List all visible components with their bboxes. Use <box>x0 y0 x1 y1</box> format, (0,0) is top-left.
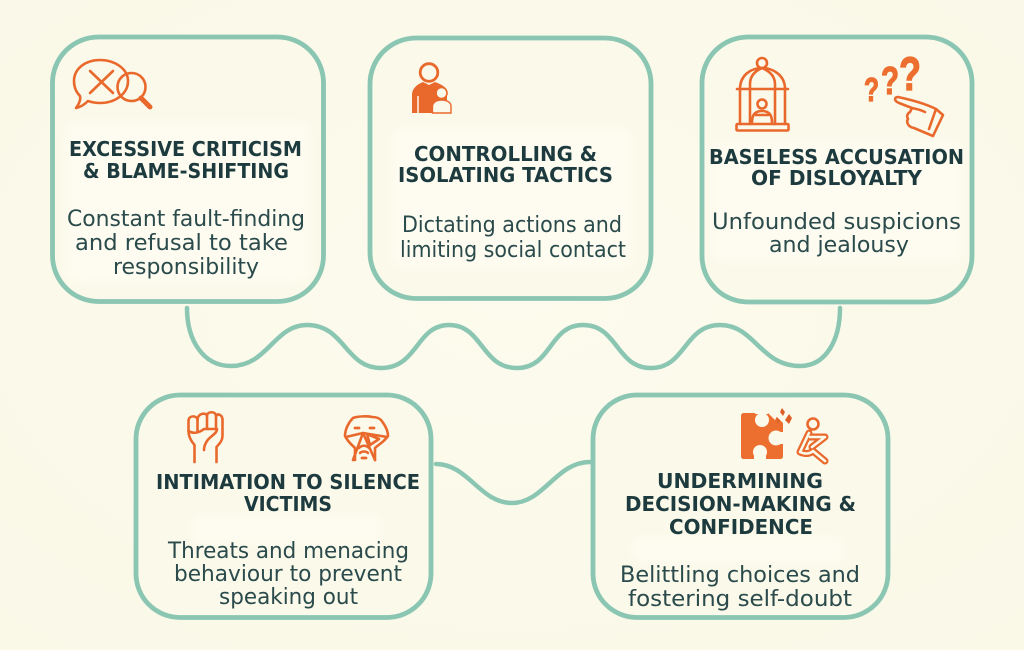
heading: CONTROLLING & <box>414 142 597 166</box>
panel: baseless accusation <box>702 37 972 302</box>
icon: question marks <box>864 47 921 108</box>
heading: UNDERMINING <box>657 469 823 493</box>
icon: broken puzzle piece <box>741 408 792 461</box>
panel: undermining confidence <box>593 395 888 618</box>
icon: speech bubble and magnifier <box>74 60 150 108</box>
body text <box>400 213 626 263</box>
connector: short wave between bottom cards <box>436 462 590 503</box>
body text <box>167 539 409 610</box>
heading: ISOLATING TACTICS <box>398 163 613 187</box>
heading <box>709 145 964 190</box>
body text <box>620 563 860 612</box>
heading <box>398 142 613 187</box>
body text: Unfounded suspicions <box>712 210 961 235</box>
heading: & BLAME-SHIFTING <box>83 159 289 183</box>
icon: raised fist <box>188 412 222 462</box>
icon: crouching figure <box>800 418 825 461</box>
body text: behaviour to prevent <box>174 562 402 587</box>
heading: EXCESSIVE CRITICISM <box>69 137 302 161</box>
body text <box>67 207 305 280</box>
icon: pointing hand <box>895 97 943 136</box>
heading <box>625 469 856 539</box>
body text: and refusal to take <box>75 231 288 256</box>
heading <box>156 470 420 516</box>
body text: Threats and menacing <box>167 539 409 564</box>
icon: birdcage with person <box>736 58 788 130</box>
body text: Constant fault-finding <box>67 207 305 232</box>
icon: adult and child <box>412 64 451 113</box>
body text: responsibility <box>113 255 259 280</box>
icon: silenced face <box>345 416 388 460</box>
body text: Dictating actions and <box>402 213 622 238</box>
body text: limiting social contact <box>400 238 626 263</box>
icon: question marks: ? <box>899 47 921 100</box>
heading: CONFIDENCE <box>669 515 813 539</box>
heading: BASELESS ACCUSATION <box>709 145 964 169</box>
icon: question marks: ? <box>864 71 879 108</box>
body text: speaking out <box>219 585 358 610</box>
body text: fostering self-doubt <box>628 587 852 612</box>
body text: Belittling choices and <box>620 563 860 588</box>
heading: INTIMATION TO SILENCE <box>156 470 420 494</box>
heading: DECISION-MAKING & <box>625 492 856 516</box>
body text <box>712 210 961 258</box>
heading: OF DISLOYALTY <box>751 166 923 190</box>
heading: VICTIMS <box>244 492 332 516</box>
panel: intimidation to silence <box>136 395 431 618</box>
panel: controlling and isolating <box>370 38 651 298</box>
body text: and jealousy <box>769 233 909 258</box>
panel: excessive criticism <box>52 37 324 302</box>
icon: question marks: ? <box>881 60 899 103</box>
heading <box>69 137 302 183</box>
connector: long wave between top cards <box>187 308 840 368</box>
